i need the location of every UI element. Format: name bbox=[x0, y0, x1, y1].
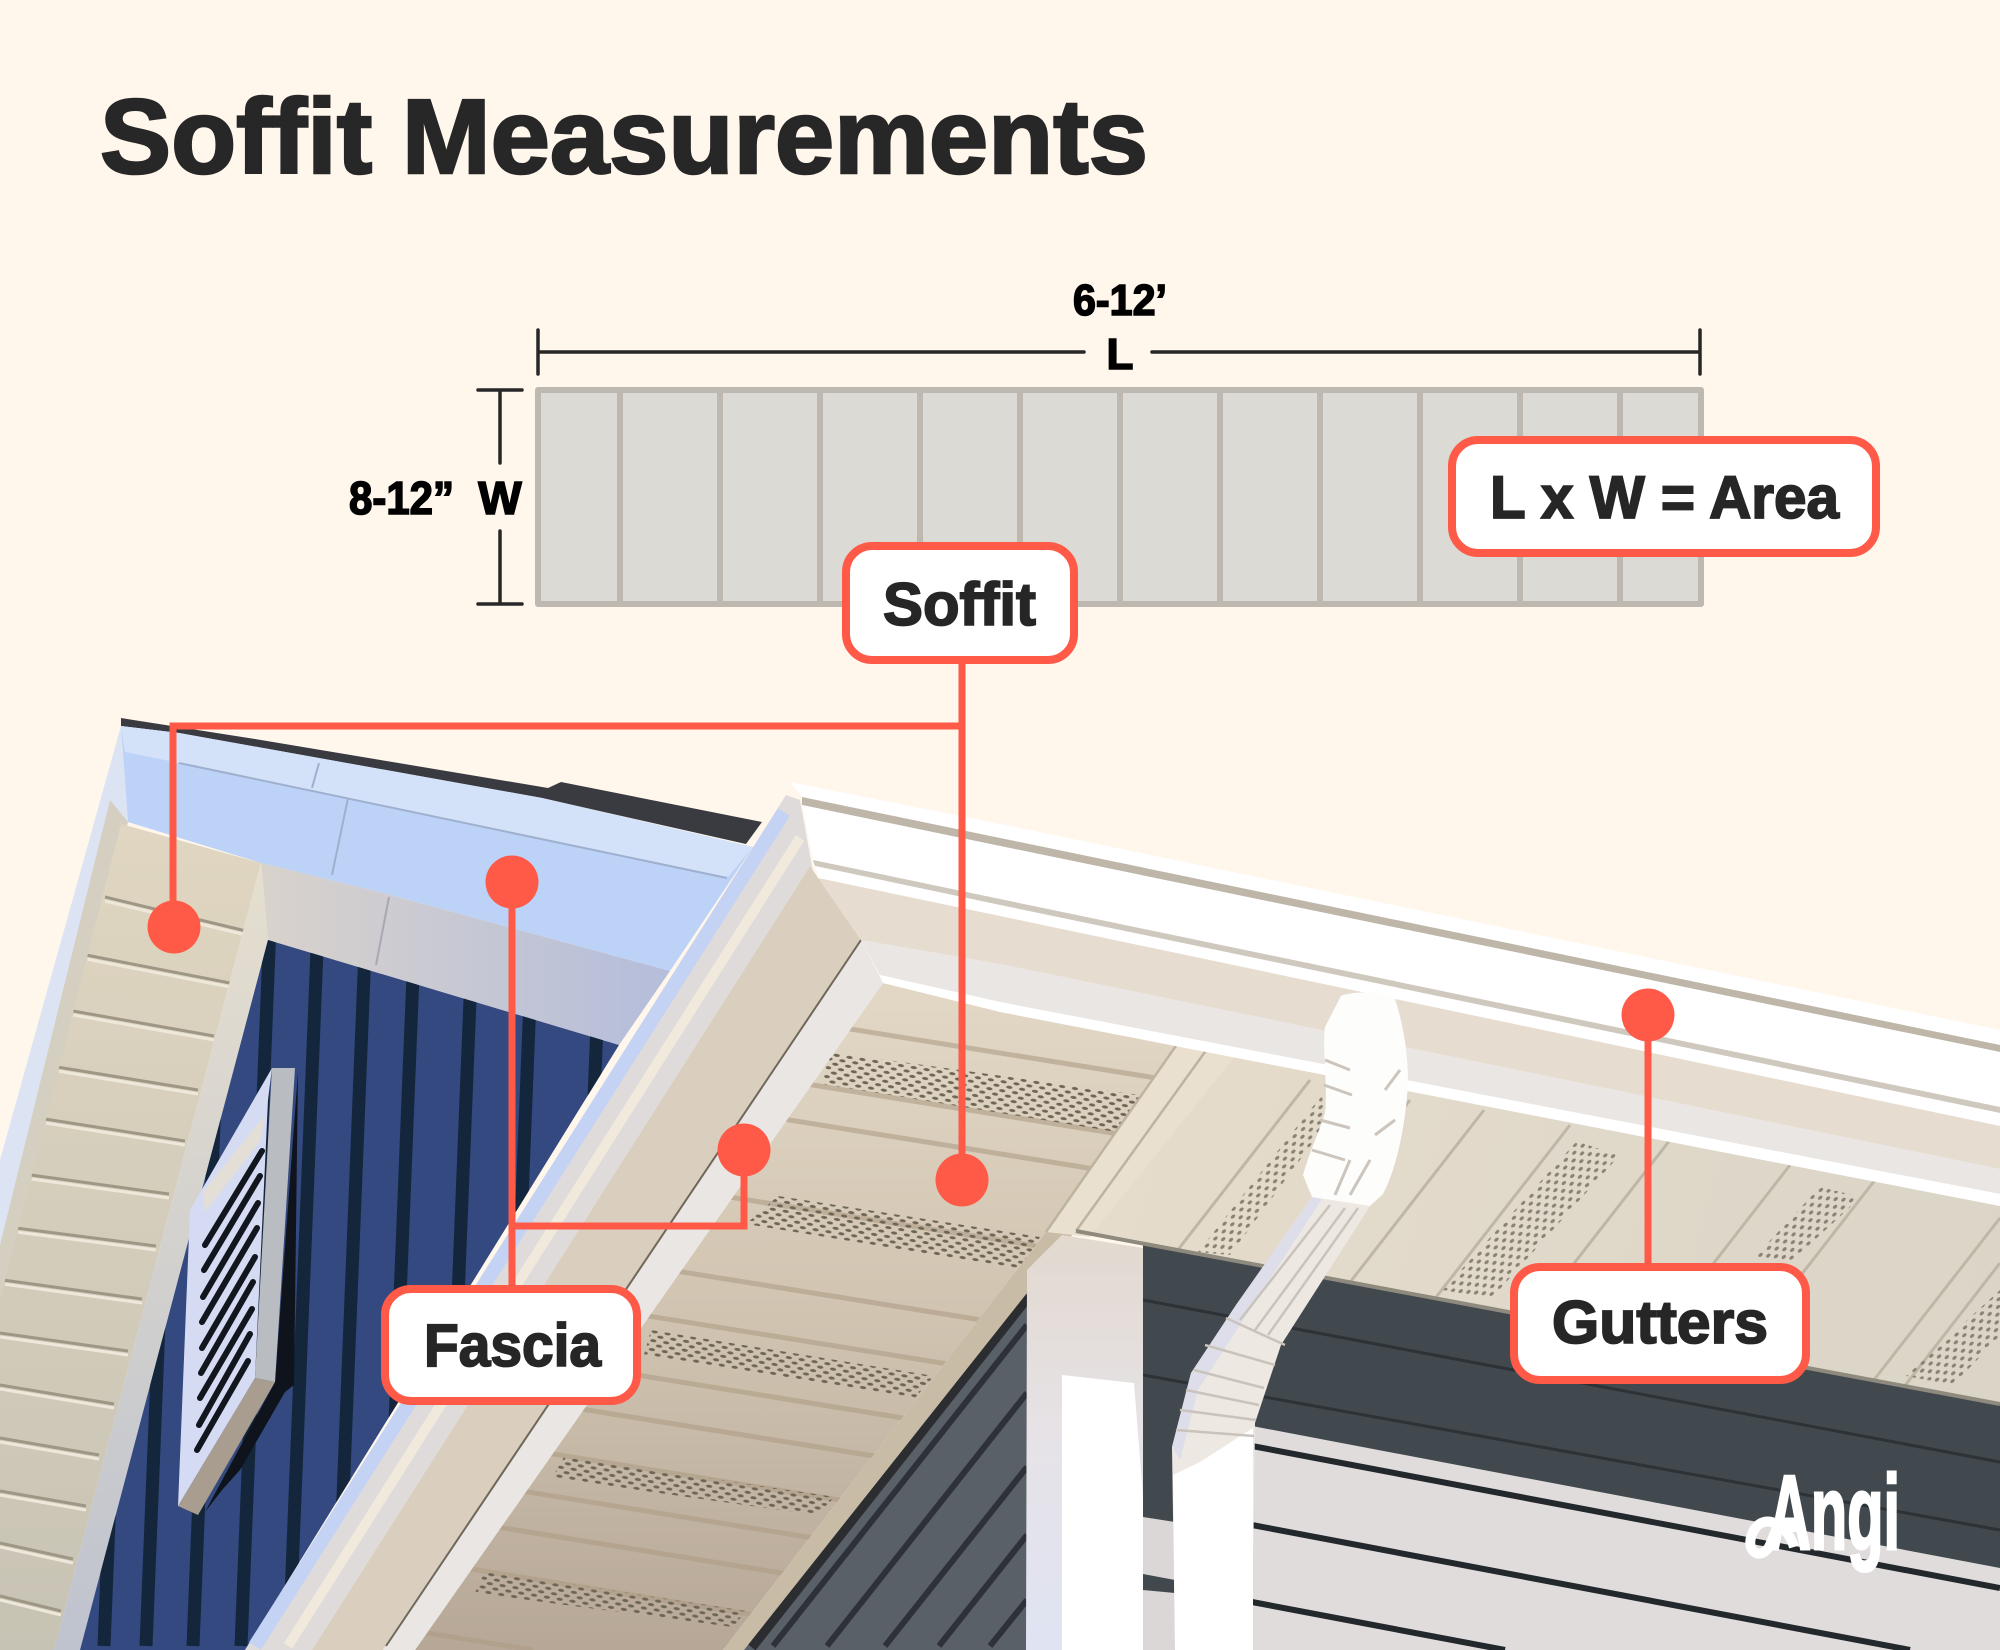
fascia callout leaders bbox=[486, 856, 770, 1290]
downspout bbox=[1172, 993, 1408, 1650]
logo: Angi: Angi bbox=[1768, 1454, 1900, 1572]
horizontal gutter bbox=[790, 782, 2000, 1206]
main wall upper dark siding bbox=[1076, 1231, 2000, 1650]
gable trim bbox=[54, 863, 268, 1650]
dark siding beside column bbox=[730, 1225, 1080, 1650]
soffit panel bbox=[538, 390, 1701, 604]
corner column bbox=[1026, 1235, 1143, 1650]
soffit main section bbox=[415, 983, 1174, 1650]
fascia marker upper bbox=[486, 856, 538, 908]
logo: Angi bbox=[1750, 1454, 1900, 1572]
gable soffit bbox=[0, 824, 261, 1650]
label: fascia bbox=[385, 1289, 637, 1401]
label: soffit bbox=[846, 546, 1074, 660]
label: area formula bbox=[1452, 440, 1876, 553]
mitre seam band bbox=[1046, 1040, 1240, 1237]
length dimension line bbox=[538, 330, 1700, 374]
soffit vent strips bbox=[823, 1052, 1154, 1135]
house photo illustration bbox=[0, 718, 2000, 1650]
width letter: W bbox=[478, 472, 522, 524]
downspout elbow bbox=[1303, 993, 1408, 1206]
label: area formula: L x W = Area bbox=[1490, 464, 1840, 531]
title: Soffit Measurements bbox=[100, 78, 1148, 196]
label: gutters bbox=[1514, 1267, 1806, 1380]
width value: 8-12” bbox=[349, 472, 454, 524]
length letter: L bbox=[1107, 330, 1133, 379]
fascia marker lower bbox=[718, 1124, 770, 1176]
rake gutter diagonal bbox=[245, 795, 883, 1650]
gable rake edge bbox=[0, 726, 128, 1305]
soffit callout leaders bbox=[148, 660, 988, 1206]
shingles bbox=[121, 718, 762, 844]
soffit marker main bbox=[936, 1154, 988, 1206]
soffit edge trim bbox=[723, 1225, 1080, 1650]
label: fascia: Fascia bbox=[424, 1312, 602, 1379]
soffit dimension diagram bbox=[349, 276, 1701, 604]
lower trim board bbox=[261, 863, 670, 1045]
label: soffit: Soffit bbox=[883, 571, 1036, 638]
white siding bbox=[1252, 1426, 2000, 1650]
gutters callout leader bbox=[1622, 988, 1674, 1268]
blue-lit fascia bbox=[121, 726, 753, 971]
wall vent bbox=[178, 1068, 298, 1515]
length value: 6-12’ bbox=[1073, 276, 1167, 325]
label: gutters: Gutters bbox=[1552, 1289, 1768, 1356]
navy board and batten wall bbox=[80, 900, 619, 1650]
soffit side section bbox=[1046, 1040, 2000, 1404]
soffit marker gable bbox=[148, 900, 200, 954]
width dimension line bbox=[478, 390, 522, 604]
gutters marker bbox=[1622, 988, 1674, 1042]
